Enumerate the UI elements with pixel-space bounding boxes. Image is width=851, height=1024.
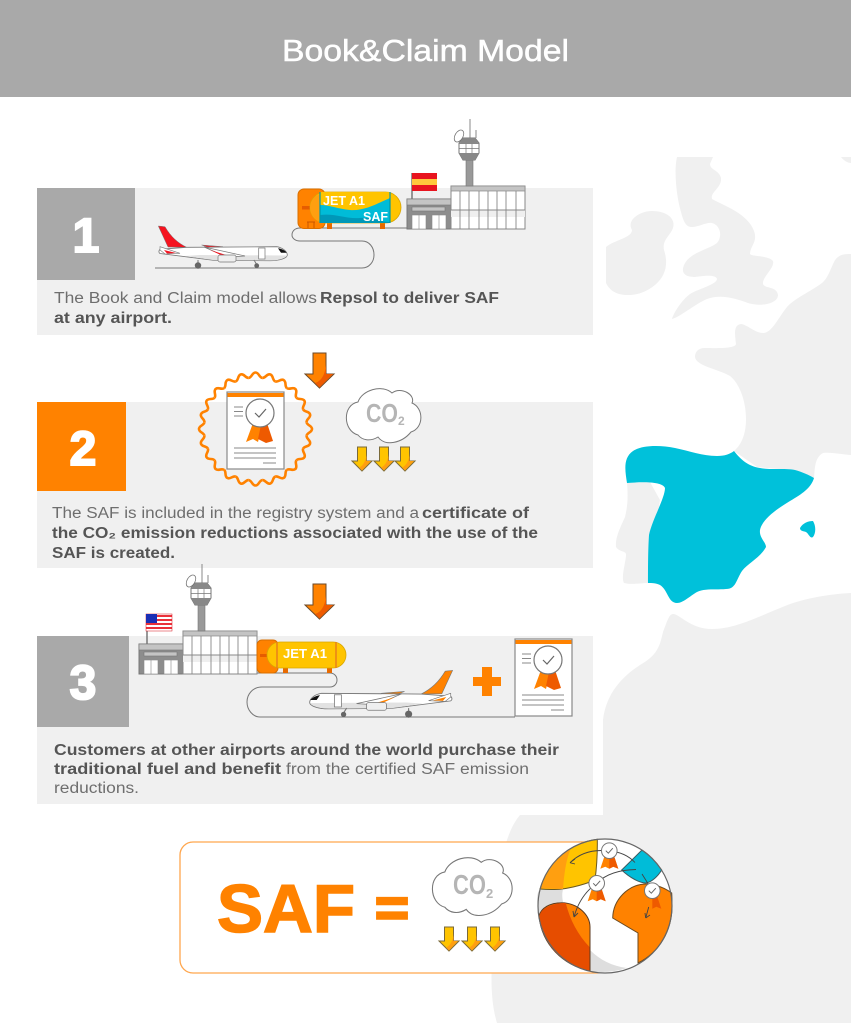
step number 1: 1 xyxy=(73,210,99,263)
icon: plus xyxy=(473,667,501,696)
icon: certificate xyxy=(515,639,572,716)
icon: certificate with scalloped seal xyxy=(199,372,312,486)
icon: CO2 cloud with down arrows: CO xyxy=(453,869,486,900)
panel 3: customers at other airports xyxy=(37,564,593,804)
arrow: step 2 to step 3 xyxy=(305,584,334,619)
step 2 text xyxy=(52,505,538,562)
panel 1: deliver SAF at any airport xyxy=(37,119,593,335)
step 2 text: certificate of xyxy=(422,505,530,522)
map: Spain highlighted xyxy=(625,446,815,603)
SAF equals: = xyxy=(375,878,409,938)
step 3 text: reductions. xyxy=(54,780,139,797)
step 1 text xyxy=(54,290,499,327)
icon: fuel tank with JET A1 and SAF: SAF xyxy=(363,210,388,224)
step 2 text: the CO₂ emission reductions associated with the use of the xyxy=(52,525,538,542)
icon: CO2 cloud with down arrows: 2 xyxy=(486,886,493,901)
icon: CO2 cloud with down arrows: 2 xyxy=(398,414,405,428)
step number 2 xyxy=(37,402,126,491)
step 3 text: Customers at other airports around the world purchase their xyxy=(54,742,559,759)
step number 2: 2 xyxy=(70,423,96,476)
pipeline to plane and certificate xyxy=(247,673,515,717)
summary box: SAF equals CO2 reduction xyxy=(180,839,672,973)
step 2 text: SAF is created. xyxy=(52,545,175,562)
step 1 text: The Book and Claim model allows xyxy=(54,290,317,307)
step number 1 xyxy=(37,188,135,280)
icon: globe with certified routes xyxy=(537,839,672,973)
step 1 text: Repsol to deliver SAF xyxy=(320,290,499,307)
SAF equals: SAF xyxy=(217,871,355,947)
step 1 text: at any airport. xyxy=(54,310,172,327)
icon: fuel tank with JET A1 and SAF: JET A1 xyxy=(323,194,365,208)
header bar xyxy=(0,0,851,97)
icon: fuel tank with JET A1 and SAF xyxy=(298,189,401,229)
icon: JET A1 fuel tank: JET A1 xyxy=(283,646,327,661)
icon: CO2 cloud with down arrows: CO xyxy=(366,398,398,428)
icon: CO2 cloud with down arrows xyxy=(346,389,421,471)
icon: JET A1 fuel tank xyxy=(257,640,346,673)
pipeline to plane xyxy=(155,228,407,268)
step 3 text: from the certified SAF emission xyxy=(286,761,529,778)
icon: red plane xyxy=(158,226,287,269)
step number 3 xyxy=(37,636,129,727)
panel 2: certificate of CO2 reductions xyxy=(37,372,593,568)
map background: Europe and North Africa xyxy=(491,157,851,1023)
icon: CO2 cloud with down arrows xyxy=(432,858,512,951)
icon: orange plane xyxy=(310,670,453,718)
arrow: step 1 to step 2 xyxy=(305,353,334,388)
step 2 text: The SAF is included in the registry system and a xyxy=(52,505,419,522)
step 3 text xyxy=(54,742,559,797)
icon: US airport xyxy=(139,564,257,674)
step number 3: 3 xyxy=(70,657,96,710)
step 3 text: traditional fuel and benefit xyxy=(54,761,281,778)
title: Book&Claim Model xyxy=(282,33,569,68)
icon: Spanish airport xyxy=(407,119,525,229)
